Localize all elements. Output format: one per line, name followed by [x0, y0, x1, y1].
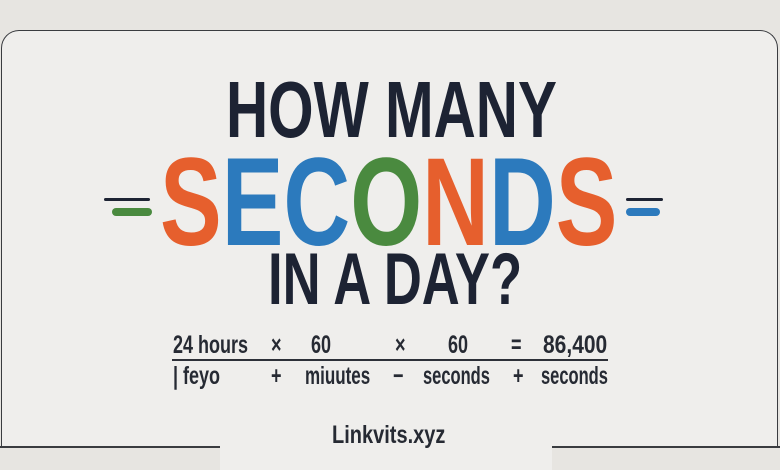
- equation: =: [511, 331, 522, 359]
- equation: ×: [271, 331, 282, 359]
- equation row 2: | feyo: [173, 362, 220, 390]
- equation: seconds: [423, 362, 490, 390]
- decoration: left lines: [104, 198, 152, 216]
- title: how many: HOW MANY: [226, 65, 557, 154]
- card bottom border right: [552, 446, 780, 448]
- footer: site name: Linkvits.xyz: [332, 421, 445, 449]
- equation: 86,400: [543, 331, 607, 359]
- title: seconds: SECONDS: [160, 133, 617, 272]
- equation: +: [513, 362, 524, 390]
- equation: −: [393, 362, 404, 390]
- title: in a day: IN A DAY?: [268, 239, 522, 320]
- rule: [172, 359, 608, 361]
- decoration: right lines: [626, 198, 663, 216]
- equation: 60: [311, 331, 331, 359]
- card bottom border left: [0, 446, 220, 448]
- equation: miuutes: [305, 362, 370, 390]
- equation: +: [271, 362, 282, 390]
- equation row 1: 24 hours: [173, 331, 248, 359]
- equation: [172, 331, 608, 390]
- equation: 60: [448, 331, 468, 359]
- equation: seconds: [541, 362, 608, 390]
- bottom tab: [220, 446, 552, 470]
- equation: ×: [395, 331, 406, 359]
